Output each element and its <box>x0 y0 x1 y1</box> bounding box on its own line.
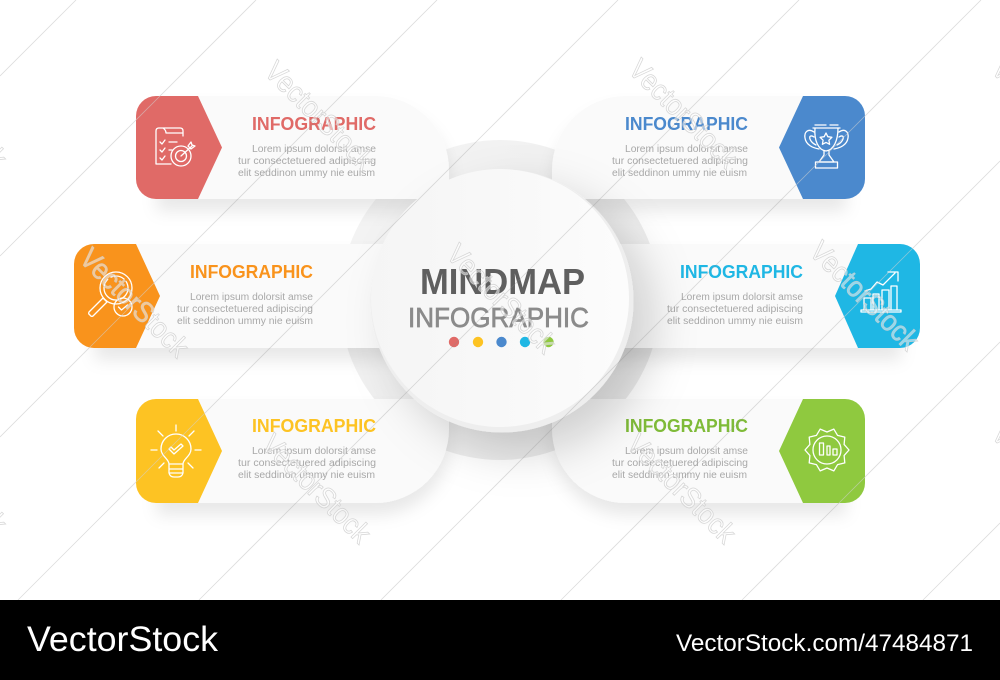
body text: Lorem ipsum dolorsit amse <box>252 144 376 155</box>
body text: tur consectetuered adipiscing <box>238 458 376 469</box>
body text: Lorem ipsum dolorsit amse <box>190 292 313 303</box>
panel: green card <box>552 399 865 503</box>
watermark text: VectorStock <box>255 428 377 550</box>
title: INFOGRAPHIC <box>252 415 376 436</box>
card body <box>552 96 845 199</box>
body text: Lorem ipsum dolorsit amse <box>625 144 748 155</box>
body text: tur consectetuered adipiscing <box>667 304 803 315</box>
card body <box>552 399 845 503</box>
body text: Lorem ipsum dolorsit amse <box>625 446 748 457</box>
footer image id: VectorStock.com/47484871 <box>676 630 973 657</box>
coloured tab <box>136 399 222 503</box>
icon: trophy <box>805 125 848 168</box>
coloured tab <box>835 244 920 348</box>
watermark text: VectorStock <box>440 238 562 360</box>
body text: tur consectetuered adipiscing <box>177 304 313 315</box>
icon: growth chart <box>861 272 901 312</box>
icon: gear with bars <box>805 429 849 471</box>
body text: Lorem ipsum dolorsit amse <box>681 292 803 303</box>
watermark text: VectorStock <box>620 428 742 550</box>
watermark lines over colour tabs <box>89 96 913 503</box>
watermark text: VectorStock <box>622 53 744 175</box>
subheading: infographic: INFOGRAPHIC <box>408 302 589 333</box>
title: INFOGRAPHIC <box>252 113 376 134</box>
circle rim <box>370 170 634 432</box>
panel: blue card <box>552 96 865 199</box>
watermark text <box>0 53 1000 550</box>
colour dots <box>449 337 554 347</box>
card body <box>94 244 400 348</box>
body text: elit seddinon ummy nie euism <box>612 168 747 179</box>
coloured tab <box>136 96 222 199</box>
title: INFOGRAPHIC <box>625 113 748 134</box>
icon: light bulb <box>151 425 201 477</box>
icon: checklist and target <box>156 128 195 166</box>
panel: yellow card <box>136 399 449 503</box>
watermark text: VectorStock <box>258 55 380 177</box>
footer bar <box>0 600 1000 680</box>
card body <box>156 399 449 503</box>
central circle <box>370 169 634 432</box>
panel: cyan card <box>600 244 920 348</box>
card body <box>600 244 900 348</box>
coloured tab <box>779 399 865 503</box>
title: INFOGRAPHIC <box>625 415 748 436</box>
heading: mindmap: MINDMAP <box>420 261 585 302</box>
body text: tur consectetuered adipiscing <box>612 458 748 469</box>
panel: orange card <box>74 244 400 348</box>
title: INFOGRAPHIC <box>680 261 803 282</box>
footer brand: VectorStock <box>27 620 219 659</box>
body text: elit seddinon ummy nie euism <box>667 316 803 327</box>
icon: magnifier with check <box>89 272 132 316</box>
body text: elit seddinon ummy nie euism <box>177 316 313 327</box>
title: INFOGRAPHIC <box>190 261 313 282</box>
body text: elit seddinon ummy nie euism <box>238 168 375 179</box>
circle face <box>371 169 629 427</box>
body text: elit seddinon ummy nie euism <box>238 470 375 481</box>
panel: red card <box>136 96 449 199</box>
watermark text: VectorStock <box>803 235 925 357</box>
outer backing circle <box>340 140 660 460</box>
coloured tab <box>779 96 865 199</box>
body text: tur consectetuered adipiscing <box>238 156 376 167</box>
body text: Lorem ipsum dolorsit amse <box>252 446 376 457</box>
coloured tab <box>74 244 160 348</box>
body text: tur consectetuered adipiscing <box>612 156 748 167</box>
watermark text: VectorStock <box>73 242 195 364</box>
body text: elit seddinon ummy nie euism <box>612 470 747 481</box>
card body <box>156 96 449 199</box>
